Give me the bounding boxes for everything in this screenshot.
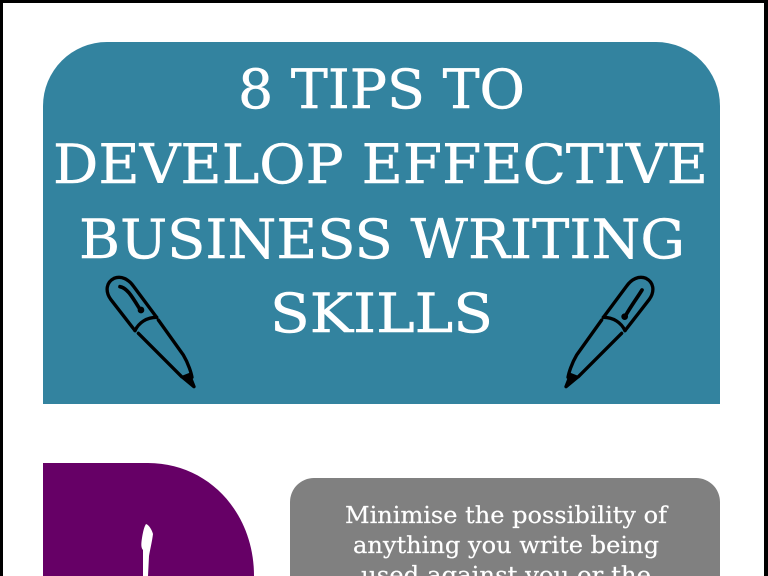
title: DEVELOP EFFECTIVE bbox=[53, 133, 708, 196]
icon: white pen tip bbox=[141, 524, 153, 576]
tip text: Minimise the possibility of bbox=[345, 503, 669, 529]
title: 8 TIPS TO bbox=[238, 58, 525, 121]
title: BUSINESS WRITING bbox=[79, 208, 685, 271]
icon: right pen bbox=[566, 277, 653, 387]
icon: left pen bbox=[107, 277, 194, 387]
panel: grey tip text bbox=[290, 478, 720, 576]
tip text: anything you write being bbox=[353, 533, 659, 559]
tip text bbox=[345, 503, 669, 576]
title: SKILLS bbox=[270, 282, 493, 345]
title bbox=[53, 58, 708, 345]
panel: purple tip badge bbox=[43, 463, 254, 576]
panel: title banner bbox=[43, 42, 720, 404]
